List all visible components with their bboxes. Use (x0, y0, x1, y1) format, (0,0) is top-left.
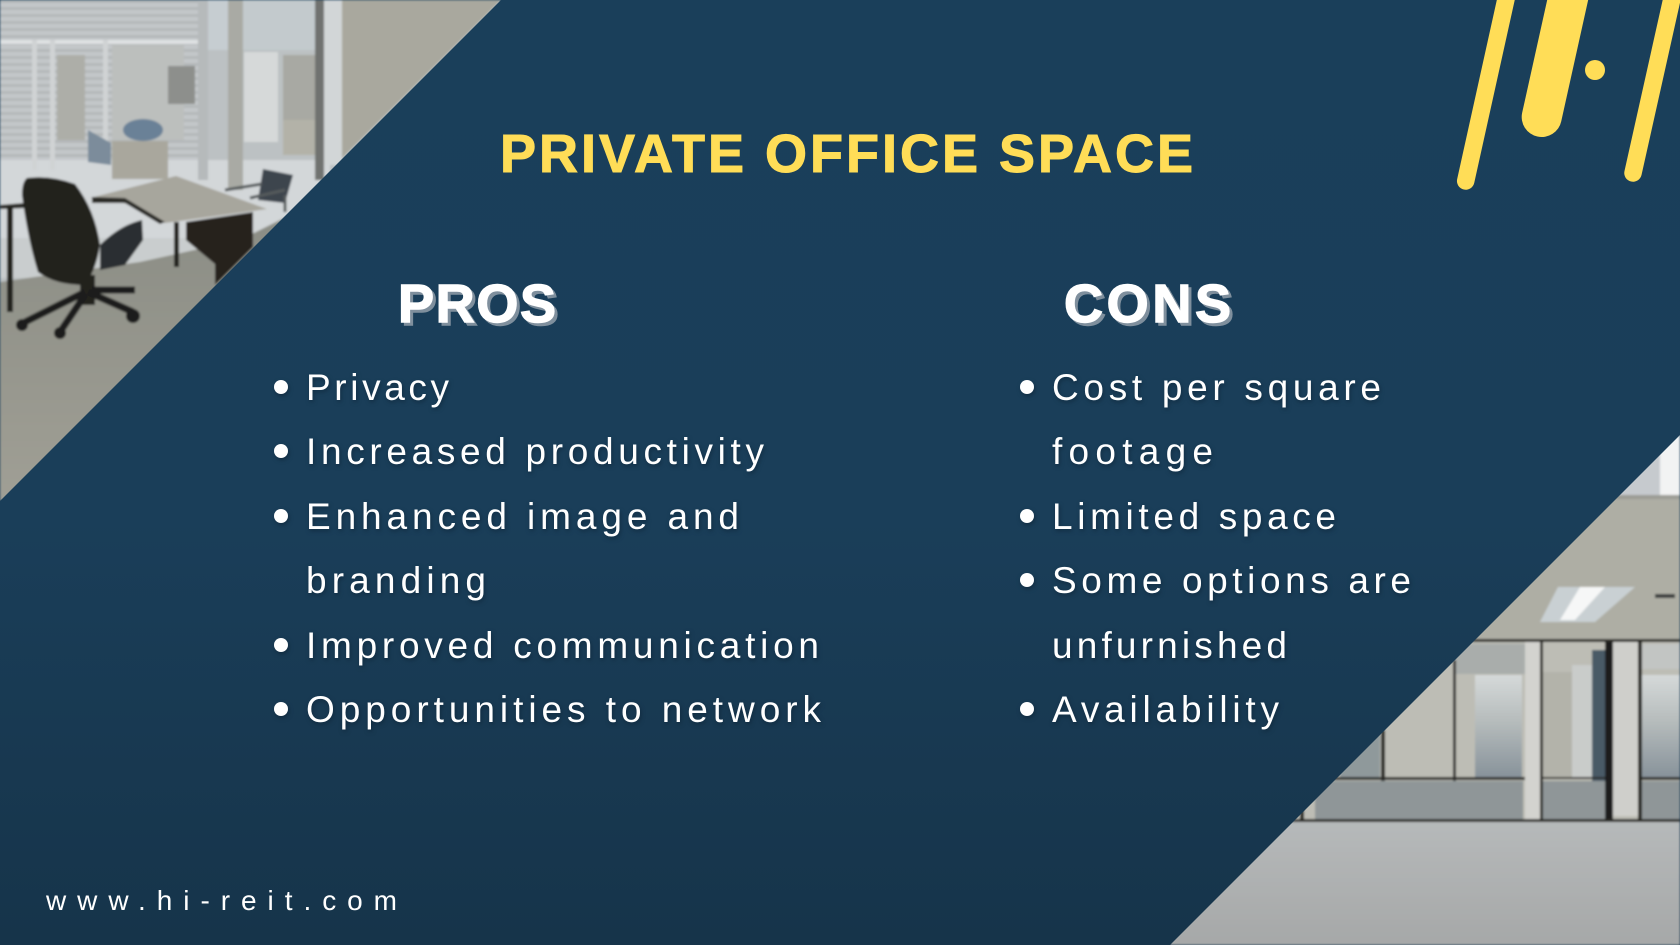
list: cons (1020, 367, 1411, 730)
pro item: enhanced image and branding: Enhanced image and (306, 496, 739, 537)
pro item: enhanced image and branding (274, 496, 739, 601)
con item: some options are unfurnished: unfurnished (1052, 625, 1287, 666)
slash: right thin (1633, 0, 1675, 173)
website url: www.hi-reit.com (45, 885, 397, 916)
photo: furnished private office, top left (0, 0, 501, 501)
heading: pros: PROS (398, 274, 556, 334)
con item: availability: Availability (1052, 689, 1280, 730)
list: pros (274, 367, 822, 730)
pro item: enhanced image and branding: branding (306, 560, 486, 601)
dot (1585, 60, 1605, 80)
title: PRIVATE OFFICE SPACE (500, 124, 1193, 184)
heading: cons: CONS (1064, 274, 1231, 334)
con item: some options are unfurnished (1020, 560, 1411, 666)
con item: cost per square footage: footage (1052, 431, 1213, 472)
pro item: opportunities to network: Opportunities to network (306, 689, 822, 730)
con item: cost per square footage (1020, 367, 1381, 472)
con item: some options are unfurnished: Some options are (1052, 560, 1411, 601)
pro item: improved communication: Improved communication (306, 625, 819, 666)
con item: cost per square footage: Cost per square (1052, 367, 1381, 408)
slash: left thin (1466, 0, 1508, 181)
slash: centre thick (1542, 0, 1571, 117)
decorative yellow slashes, top right (1466, 0, 1675, 181)
con item: limited space: Limited space (1052, 496, 1336, 537)
pro item: privacy: Privacy (306, 367, 450, 408)
pro item: increased productivity: Increased productivity (306, 431, 764, 472)
photo: empty office interior, bottom right (1170, 420, 1680, 945)
